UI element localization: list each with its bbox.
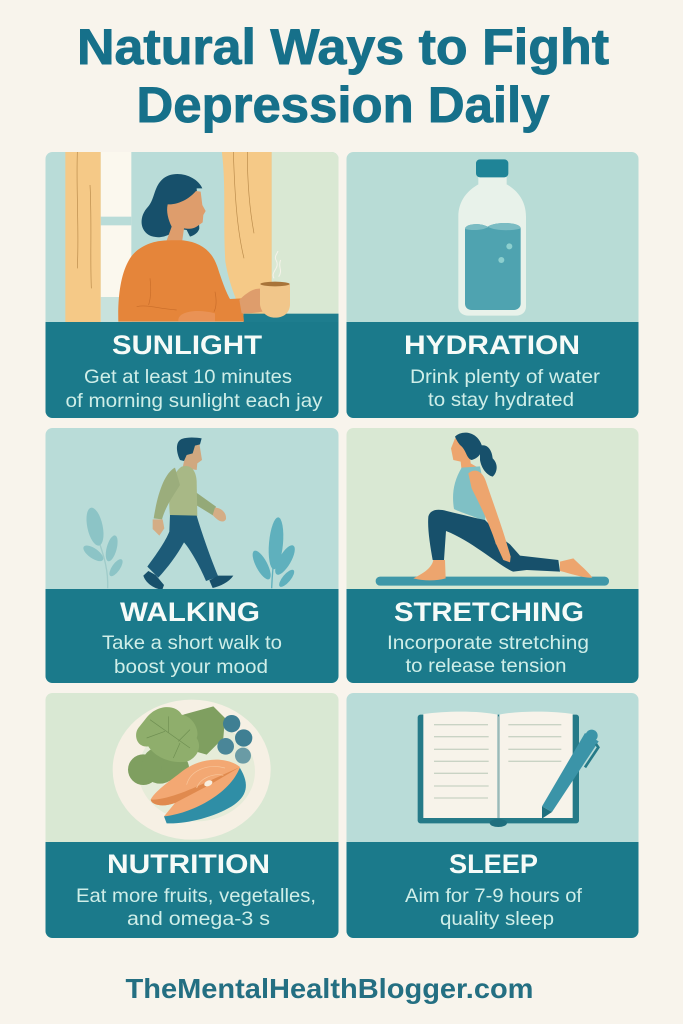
panel: walking [46, 428, 338, 683]
text band: nutrition: NUTRITION [107, 849, 270, 879]
text band: stretching [346, 589, 638, 683]
panel: sleep [346, 693, 638, 938]
title: Depression Daily [136, 77, 550, 133]
text band: hydration: HYDRATION [404, 330, 580, 360]
panel: nutrition [46, 693, 338, 938]
text band: sleep: SLEEP [449, 849, 538, 879]
illustration: woman in lunge stretch on mat [376, 433, 609, 586]
text band: sleep [346, 842, 638, 938]
text band: nutrition: and omega-3 s [127, 908, 270, 930]
text band: sunlight: of morning sunlight each jay [66, 390, 323, 412]
title [77, 19, 609, 133]
title: Natural Ways to Fight [77, 19, 609, 75]
text band: walking [46, 589, 338, 683]
text band: sunlight [46, 322, 338, 418]
text band: walking: Take a short walk to [102, 632, 282, 654]
text band: sunlight: Get at least 10 minutes [84, 366, 292, 388]
footer website: TheMentalHealthBlogger.com [126, 973, 534, 1004]
text band: sleep: Aim for 7-9 hours of [405, 885, 583, 907]
text band: sunlight: SUNLIGHT [112, 330, 263, 360]
panel: sunlight [46, 145, 342, 418]
text band: stretching: to release tension [406, 655, 566, 677]
illustration: woman with coffee by window [65, 145, 342, 325]
panel: hydration [346, 152, 638, 418]
text band: hydration: to stay hydrated [428, 389, 574, 411]
illustration: man walking with plants [81, 438, 299, 590]
text band: hydration [346, 322, 638, 418]
text band: hydration: Drink plenty of water [410, 366, 601, 388]
illustration: open journal and pen [418, 712, 599, 827]
text band: nutrition [46, 842, 338, 938]
icon: water bottle [458, 159, 526, 316]
text band: nutrition: Eat more fruits, vegetalles, [76, 885, 316, 907]
panel: stretching [346, 428, 638, 683]
illustration: plate with salmon, greens and berries [113, 700, 271, 840]
text band: sleep: quality sleep [440, 908, 554, 930]
text band: walking: boost your mood [114, 656, 268, 678]
text band: walking: WALKING [120, 597, 260, 627]
text band: stretching: STRETCHING [394, 597, 584, 627]
text band: stretching: Incorporate stretching [387, 632, 589, 654]
